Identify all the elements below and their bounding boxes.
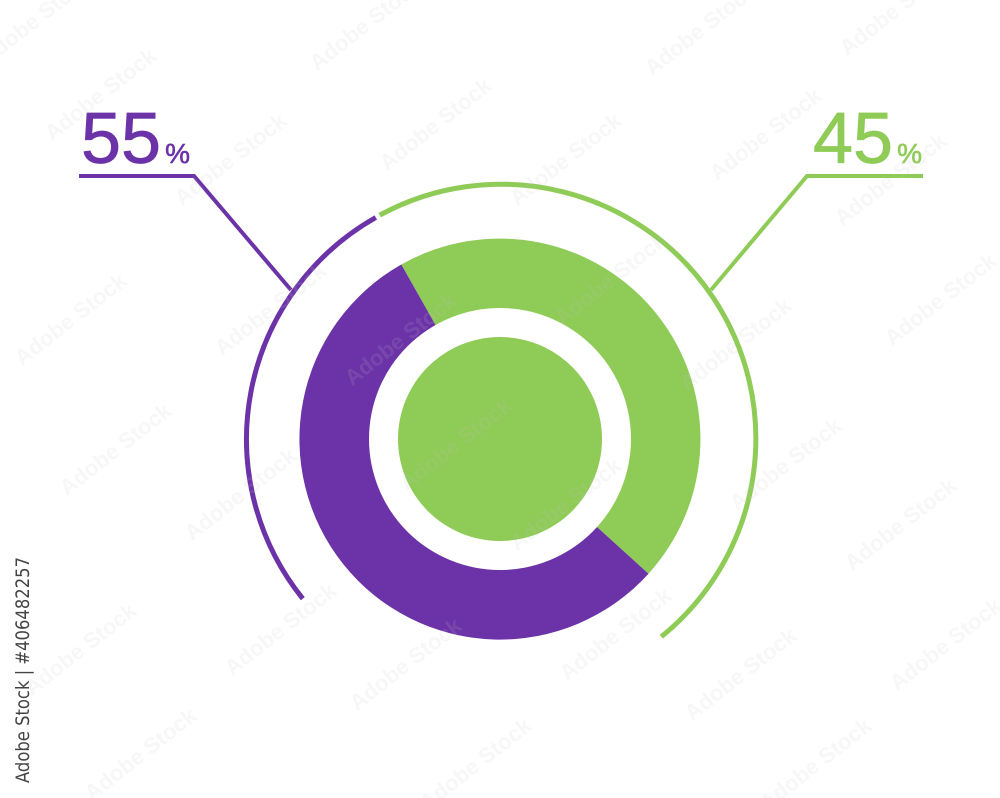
watermark pattern: Adobe Stock — [340, 287, 462, 390]
centre circle — [398, 337, 602, 541]
watermark pattern: Adobe Stock — [505, 107, 627, 210]
watermark pattern: Adobe Stock — [220, 577, 342, 680]
donut segment: 45% green — [401, 239, 700, 574]
watermark pattern: Adobe Stock — [555, 582, 677, 685]
callout line: green — [711, 176, 923, 290]
watermark pattern: Adobe Stock — [550, 227, 672, 330]
outer arc: green 45% — [380, 184, 756, 637]
watermark pattern: Adobe Stock — [210, 257, 332, 360]
callout line: purple — [79, 176, 291, 290]
watermark pattern: Adobe Stock — [840, 472, 962, 575]
donut hole — [369, 308, 631, 570]
watermark pattern: Adobe Stock — [675, 292, 797, 395]
label: 45 percent: 45% — [813, 99, 922, 179]
label: 55 percent: 55% — [81, 99, 190, 179]
watermark pattern: Adobe Stock — [505, 452, 627, 555]
watermark pattern: Adobe Stock — [55, 397, 177, 500]
watermark pattern: Adobe Stock — [180, 442, 302, 545]
outer arc: purple 55% — [247, 218, 376, 599]
watermark pattern: Adobe Stock — [20, 597, 142, 700]
donut chart — [299, 239, 700, 640]
watermark pattern: Adobe Stock — [40, 42, 162, 145]
watermark pattern: Adobe Stock — [725, 412, 847, 515]
watermark pattern: Adobe Stock — [345, 612, 467, 715]
watermark pattern: Adobe Stock — [170, 107, 292, 210]
watermark pattern: Adobe Stock — [375, 72, 497, 175]
donut segment: 55% purple — [299, 264, 648, 640]
watermark pattern: Adobe Stock — [705, 82, 827, 185]
watermark pattern: Adobe Stock — [395, 392, 517, 495]
watermark pattern: Adobe Stock — [680, 622, 802, 725]
watermark pattern: Adobe Stock — [880, 247, 1000, 350]
stock image credit: Adobe Stock | #406482257 — [12, 557, 34, 783]
watermark pattern: Adobe Stock — [10, 267, 132, 370]
watermark pattern: Adobe Stock — [830, 127, 952, 230]
